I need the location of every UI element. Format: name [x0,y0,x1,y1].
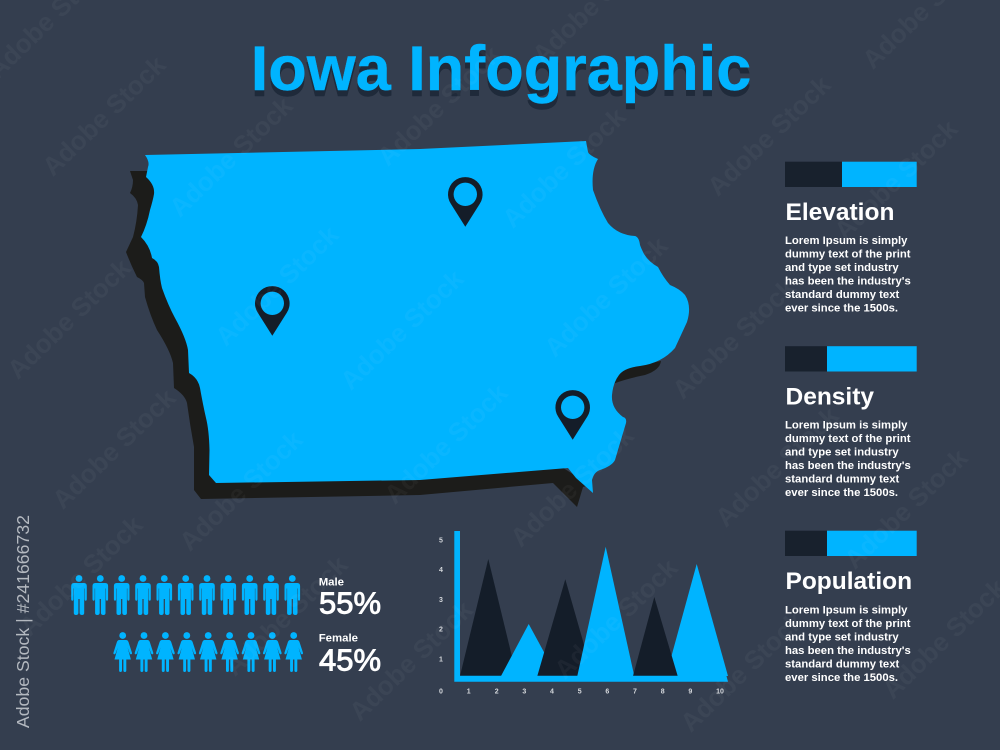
watermark pattern: Adobe Stock [378,377,514,510]
elevation text: has been the industry's [785,276,911,288]
panel: female statistic [113,632,381,678]
stock id side label: Adobe Stock | #241666732 [13,515,33,728]
density heading: Density [786,384,874,410]
elevation text: and type set industry [785,262,899,274]
population text: and type set industry [785,631,899,643]
watermark pattern: Adobe Stock [674,605,810,738]
x axis labels: 5 [578,688,582,696]
x axis labels: 7 [633,688,637,696]
elevation heading: Elevation [786,199,894,226]
chart triangles [460,547,728,676]
female label: Female [319,632,358,644]
population text: dummy text of the print [785,618,911,630]
x axis labels: 9 [688,688,692,696]
watermark pattern: Adobe Stock [828,113,964,246]
male percentage: 55% [319,586,381,620]
panel: population [785,531,917,684]
watermark pattern: Adobe Stock [548,552,684,685]
icons: male figures [71,575,300,615]
x axis labels: 3 [522,688,526,696]
y axis labels: 4 [439,567,443,574]
chart axes [454,531,728,682]
watermark pattern: Adobe Stock [838,442,974,575]
watermark pattern: Adobe Stock [496,101,632,234]
watermark pattern: Adobe Stock [36,49,172,182]
y axis labels [439,538,443,664]
elevation text: standard dummy text [785,289,899,301]
watermark pattern: Adobe Stock [1,252,137,385]
elevation text: Lorem Ipsum is simply [785,235,908,247]
y axis labels: 5 [439,538,443,544]
population text: has been the industry's [785,645,911,657]
chart: triangle area chart [439,531,728,696]
y axis labels: 1 [439,657,443,664]
y axis labels: 3 [439,597,443,604]
icons: female figures [113,632,303,672]
icon: map pin north [448,177,483,227]
density text: standard dummy text [785,474,899,486]
watermark pattern: Adobe Stock [334,263,470,396]
watermark pattern: Adobe Stock [209,219,345,352]
density text: dummy text of the print [785,433,911,445]
x axis labels: 0 [439,688,443,696]
x axis labels: 10 [716,688,724,696]
map shadow [126,171,661,507]
x axis labels: 8 [661,688,665,696]
panel: elevation [785,162,917,314]
watermark pattern: Adobe Stock [538,230,674,363]
watermark pattern: Adobe Stock [343,594,479,727]
density text: has been the industry's [785,460,911,472]
map: Iowa state [126,141,689,507]
male label: Male [319,576,344,588]
density text: ever since the 1500s. [785,487,898,499]
elevation text: dummy text of the print [785,248,911,260]
watermark pattern: Adobe Stock [504,420,640,553]
x axis labels: 4 [550,688,554,696]
watermark pattern: Adobe Stock [709,400,845,533]
icon: map pin southeast [555,390,590,440]
title: Iowa Infographic [251,34,751,104]
watermark pattern: Adobe Stock [13,509,149,642]
panel: density [785,346,917,499]
watermark pattern: Adobe Stock [218,549,354,682]
x axis labels: 1 [467,688,471,696]
population text: standard dummy text [785,658,899,670]
map shape [141,141,689,493]
population bar [785,531,917,556]
watermark pattern: Adobe Stock [46,382,182,515]
density bar [785,346,917,372]
title: Iowa Infographic [251,40,751,110]
y axis labels: 2 [439,627,443,634]
population text: ever since the 1500s. [785,672,898,684]
x axis labels [439,688,724,696]
density text: Lorem Ipsum is simply [785,420,908,432]
density text: and type set industry [785,447,899,459]
x axis labels: 6 [605,688,609,696]
panel: male statistic [71,575,381,620]
x axis labels: 2 [495,688,499,696]
watermark pattern: Adobe Stock [371,39,507,172]
population text: Lorem Ipsum is simply [785,604,908,616]
female percentage: 45% [319,642,381,678]
watermark pattern: Adobe Stock [701,69,837,202]
watermark pattern: Adobe Stock [173,424,309,557]
watermark pattern: Adobe Stock [666,272,802,405]
icon: map pin west [255,286,290,336]
elevation bar [785,162,917,187]
watermark pattern: Adobe Stock [163,90,299,223]
elevation text: ever since the 1500s. [785,302,898,314]
population heading: Population [786,568,912,595]
